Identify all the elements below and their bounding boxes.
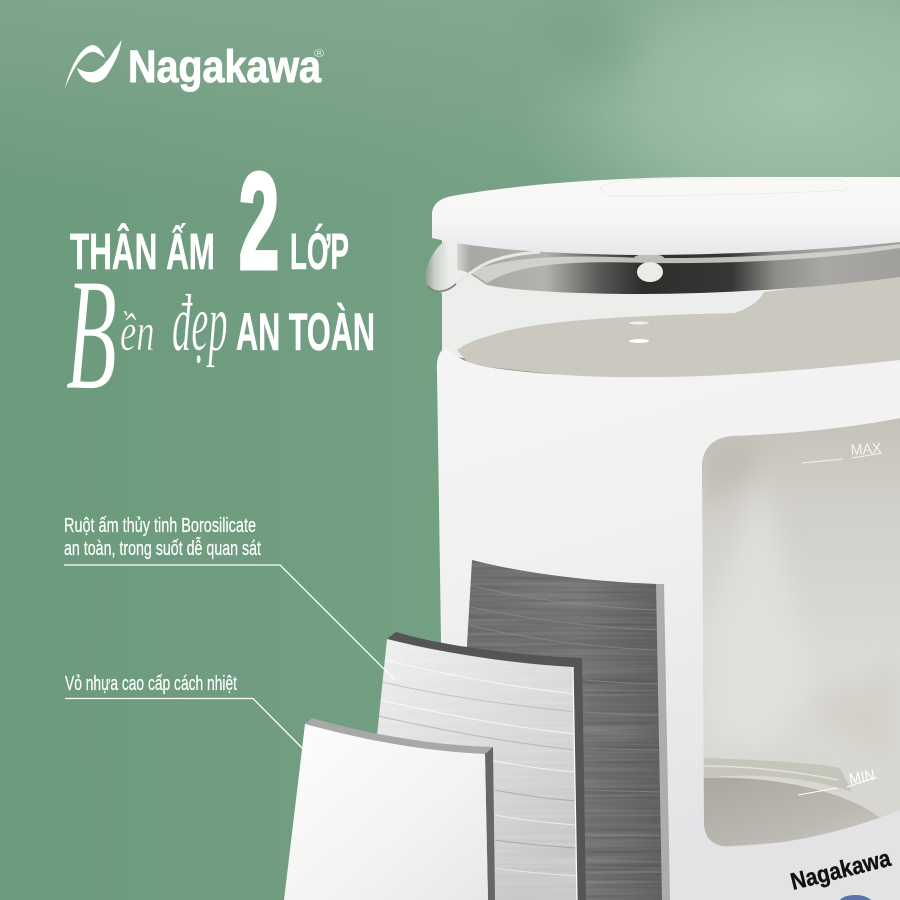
heading text: THÂN ẤM: THÂN ẤM (70, 222, 215, 280)
icon: logo swoosh (65, 40, 122, 89)
layer: front white plastic (284, 718, 495, 900)
lid hinge ball (634, 254, 664, 282)
heading text: AN TOÀN: AN TOÀN (236, 302, 375, 362)
script text: Bền đẹp: B (66, 245, 117, 423)
script text: Bền đẹp: ền (120, 302, 155, 362)
viewing window (702, 418, 900, 848)
registered mark: ® (314, 48, 324, 60)
heading: THÂN ẤM 2 LỚP (70, 145, 349, 297)
lid handle (601, 178, 848, 196)
control button (840, 895, 871, 900)
callout leader line (64, 565, 395, 680)
label: MAX (802, 440, 882, 463)
water surface (457, 275, 900, 385)
glass rim highlight (470, 244, 900, 283)
label: MIN (798, 767, 877, 795)
lid (432, 177, 900, 255)
layer: back dark steel (452, 560, 670, 900)
spout (425, 241, 540, 292)
label: MAX: MAX (850, 440, 882, 459)
callout: inner glass layer (64, 515, 395, 680)
label: MIN: MIN (848, 767, 876, 788)
callout text: Vỏ nhựa cao cấp cách nhiệt (65, 673, 237, 695)
callout text: an toàn, trong suốt dễ quan sát (64, 537, 261, 560)
callout text: Ruột ấm thủy tinh Borosilicate (64, 515, 256, 537)
base ring (704, 778, 880, 846)
metal band (457, 215, 900, 294)
logo: Nagakawa (65, 40, 324, 92)
script text: Bền đẹp (66, 245, 228, 423)
callout: outer plastic layer (65, 673, 313, 759)
outer body shell (437, 347, 900, 900)
heading text: LỚP: LỚP (290, 223, 349, 280)
kettle (425, 177, 900, 900)
logo wordmark: Nagakawa (128, 41, 322, 92)
callout text (64, 515, 261, 560)
kettle glass body (442, 205, 900, 385)
callout leader line (65, 698, 313, 759)
script text: Bền đẹp: đẹp (172, 277, 228, 368)
layer cutaway (284, 560, 670, 900)
window reflections (706, 447, 882, 732)
layer: middle brushed steel (360, 632, 586, 900)
big number 2: 2 (239, 145, 279, 297)
subheading: Bền đẹp AN TOÀN (66, 245, 375, 423)
